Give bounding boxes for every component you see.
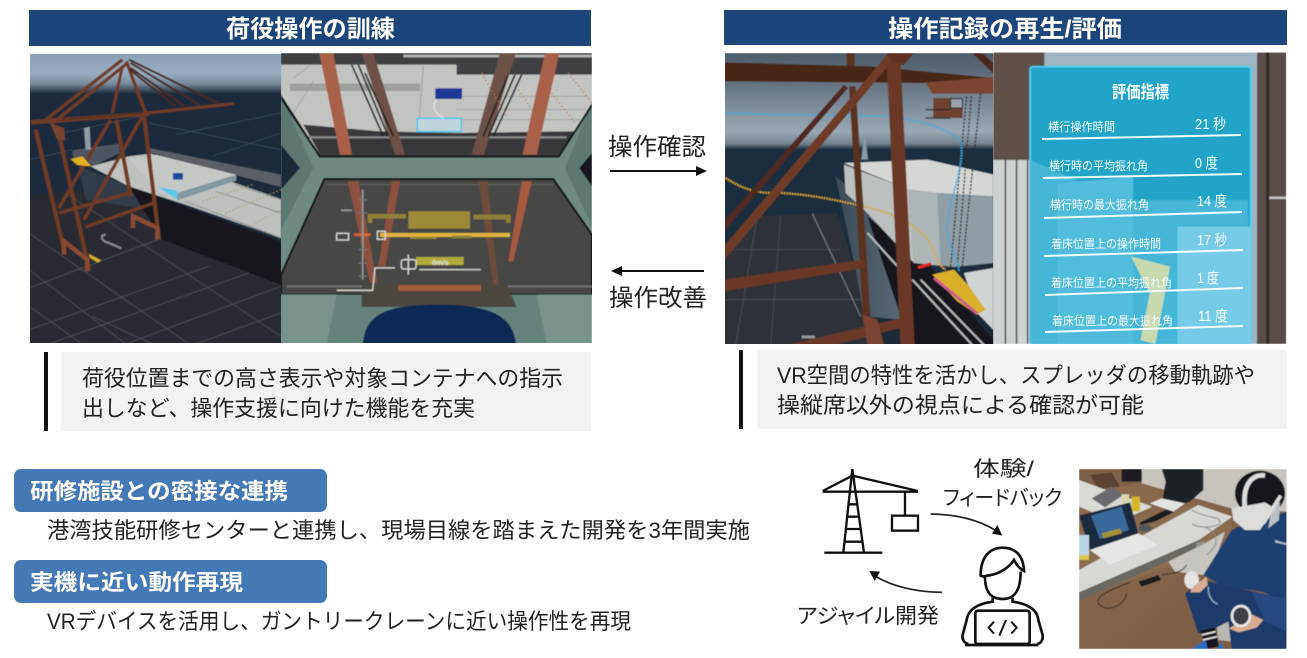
row: traverse operation time (1042, 116, 1241, 139)
row: landing maximum sway: 着床位置上の最大振れ角 (1052, 313, 1173, 328)
arrow: crane to developer (931, 514, 1002, 536)
row: traverse average sway (1043, 155, 1242, 178)
arrow: right (610, 166, 707, 176)
row: traverse operation time: 横行操作時間 (1048, 119, 1115, 134)
pill heading: realistic: 実機に近い動作再現 (30, 570, 243, 595)
row: traverse average sway: 横行時の平均振れ角 (1049, 159, 1148, 173)
pill heading: collaboration: 研修施設との密接な連携 (30, 479, 288, 504)
panel title: 評価指標 (1112, 83, 1169, 102)
diagram: agile development loop (797, 458, 1062, 645)
row: landing maximum sway (1045, 308, 1243, 332)
row: traverse maximum sway: 14 度 (1197, 193, 1227, 210)
text: collaboration description: 港湾技能研修センターと連携し、現場目線を踏まえた開発を3年間実施 (47, 518, 750, 543)
label: experience feedback: フィードバック (943, 487, 1062, 510)
text block: training description: 出しなど、操作支援に向けた機能を充実 (82, 396, 475, 421)
row: landing average sway: 1 度 (1197, 270, 1219, 287)
arrows between panels (608, 134, 707, 312)
text block: replay description: 操縦席以外の視点による確認が可能 (777, 393, 1144, 418)
text block: replay description (739, 350, 1287, 429)
row: landing operation time: 17 秒 (1197, 232, 1227, 249)
arrow: left (611, 266, 704, 276)
heading: training (29, 10, 591, 46)
row: landing average sway: 着床位置上の平均振れ角 (1051, 275, 1172, 290)
text block: training description (44, 352, 591, 431)
row: landing average sway (1045, 270, 1243, 295)
label: operation improvement: 操作改善 (609, 285, 707, 312)
section: realistic operation (14, 560, 631, 634)
pill heading: realistic (14, 560, 327, 603)
row: landing operation time: 着床位置上の操作時間 (1051, 236, 1161, 251)
heading: training: 荷役操作の訓練 (226, 16, 395, 43)
panel: evaluation indicators (1042, 83, 1243, 332)
icon: crane (823, 469, 918, 553)
row: traverse maximum sway (1044, 193, 1242, 218)
label: operation check: 操作確認 (608, 134, 706, 161)
row: landing maximum sway: 11 度 (1198, 308, 1228, 325)
label: experience feedback: 体験/ (973, 458, 1034, 481)
image: gantry crane and ship overview (29, 53, 282, 344)
label: agile development: アジャイル開発 (797, 605, 939, 628)
row: landing operation time (1044, 232, 1243, 256)
heading: replay: 操作記録の再生/評価 (888, 16, 1122, 43)
panel: loading operation training (29, 10, 592, 431)
section: close collaboration (14, 469, 750, 543)
label: experience feedback (943, 458, 1062, 510)
image: replay with spreader trajectory (724, 53, 994, 345)
image: operator cab view (280, 53, 592, 344)
text block: training description: 荷役位置までの高さ表示や対象コンテナへの指示 (82, 366, 563, 391)
arrow: developer to crane (869, 571, 942, 592)
row: traverse average sway: 0 度 (1195, 155, 1218, 172)
heading: replay (724, 10, 1287, 45)
image: operator cab view: 0m/s (432, 258, 449, 267)
icon: developer with laptop (962, 548, 1043, 645)
image: evaluation panel background (993, 52, 1286, 344)
row: traverse maximum sway: 横行時の最大振れ角 (1050, 198, 1149, 212)
photo: developer testing VR headset (1079, 469, 1287, 649)
pill heading: collaboration (14, 469, 327, 512)
row: traverse operation time: 21 秒 (1195, 116, 1226, 133)
text block: replay description: VR空間の特性を活かし、スプレッダの移動軌跡や (777, 363, 1255, 388)
panel: replay and evaluation (724, 10, 1287, 429)
text: realistic description: VRデバイスを活用し、ガントリークレーンに近い操作性を再現 (47, 609, 631, 634)
